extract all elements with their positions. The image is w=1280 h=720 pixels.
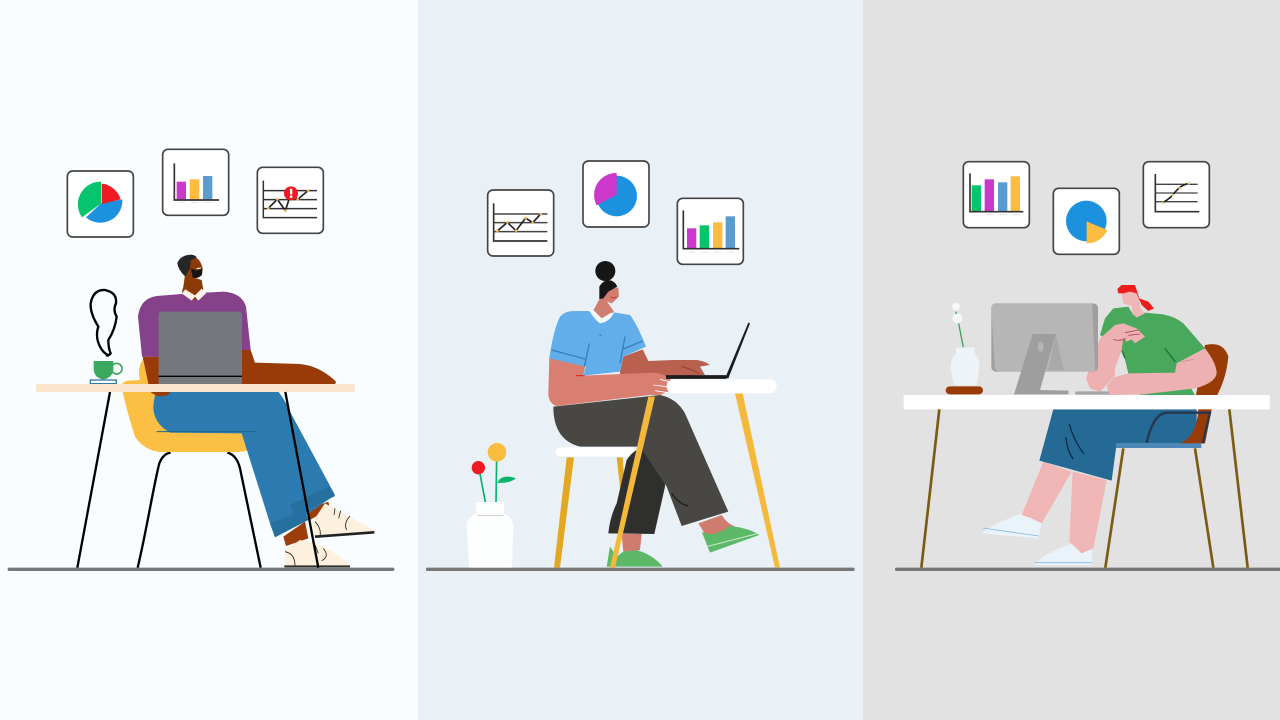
- trousers: [553, 395, 728, 526]
- woman: [548, 261, 759, 567]
- ground line: [8, 568, 394, 571]
- front arm: [548, 357, 673, 406]
- stool: [554, 447, 636, 568]
- icon: coffee cup: [90, 361, 122, 384]
- chair seat and arm: [1116, 409, 1212, 448]
- panel: middle background: [418, 0, 863, 720]
- back leg: [608, 448, 665, 534]
- panel: woman with laptop: [426, 161, 855, 571]
- back arm: [620, 349, 710, 377]
- ankles: [283, 502, 330, 546]
- back shoe: [607, 547, 663, 567]
- card: pie chart: [583, 161, 649, 227]
- chair back: [1105, 344, 1228, 568]
- card: bar chart: [963, 162, 1029, 228]
- front shoe: [702, 526, 759, 553]
- front foot: [698, 515, 735, 537]
- icon: alert: [284, 186, 298, 200]
- raised arm and hand: [1086, 323, 1145, 392]
- card: line chart: [488, 190, 554, 256]
- neck: [1132, 298, 1145, 318]
- head: [1122, 292, 1139, 307]
- ground line: [426, 568, 855, 571]
- panel: right background: [863, 0, 1280, 720]
- monitor: [991, 303, 1110, 395]
- neck opening: [593, 311, 614, 320]
- card: bar chart: [163, 149, 229, 215]
- hair bun: [595, 261, 615, 281]
- head: [177, 255, 203, 278]
- neck: [593, 295, 614, 321]
- shorts: [1039, 409, 1197, 481]
- trouser cuffs: [270, 487, 335, 537]
- lower arm: [1107, 348, 1217, 395]
- front arm: [242, 350, 336, 385]
- card: line chart with alert: [257, 167, 323, 233]
- chair: [121, 358, 261, 568]
- panel: man at desk with laptop: [8, 149, 394, 571]
- shirt: [549, 311, 646, 376]
- back arm: [143, 357, 170, 396]
- desk: [36, 384, 355, 568]
- desk: [667, 379, 780, 568]
- hair: [1117, 285, 1154, 311]
- card: line chart: [1143, 162, 1209, 228]
- card: pie chart: [67, 171, 133, 237]
- flower vase: [946, 303, 983, 394]
- legs: [1022, 462, 1072, 523]
- desk front leg: [610, 397, 655, 568]
- back foot: [622, 534, 642, 552]
- neck: [182, 275, 203, 301]
- trousers: [153, 392, 335, 537]
- shoes: [982, 513, 1092, 565]
- torso: [1100, 307, 1205, 395]
- laptop: [159, 312, 242, 386]
- card: bar chart: [677, 198, 743, 264]
- panel: person at desktop computer: [895, 162, 1280, 571]
- ground line: [895, 568, 1280, 571]
- panel: left background: [0, 0, 418, 720]
- man: [138, 255, 374, 567]
- torso: [138, 292, 251, 357]
- desk: [904, 395, 1270, 568]
- person: [982, 285, 1217, 565]
- icon: coffee steam: [91, 290, 117, 356]
- collar: [589, 310, 614, 323]
- shoes: [284, 503, 374, 567]
- flower vase: [467, 443, 516, 568]
- card: pie chart: [1053, 188, 1119, 254]
- head: [599, 280, 619, 303]
- collar: [182, 289, 206, 301]
- laptop: [666, 323, 750, 378]
